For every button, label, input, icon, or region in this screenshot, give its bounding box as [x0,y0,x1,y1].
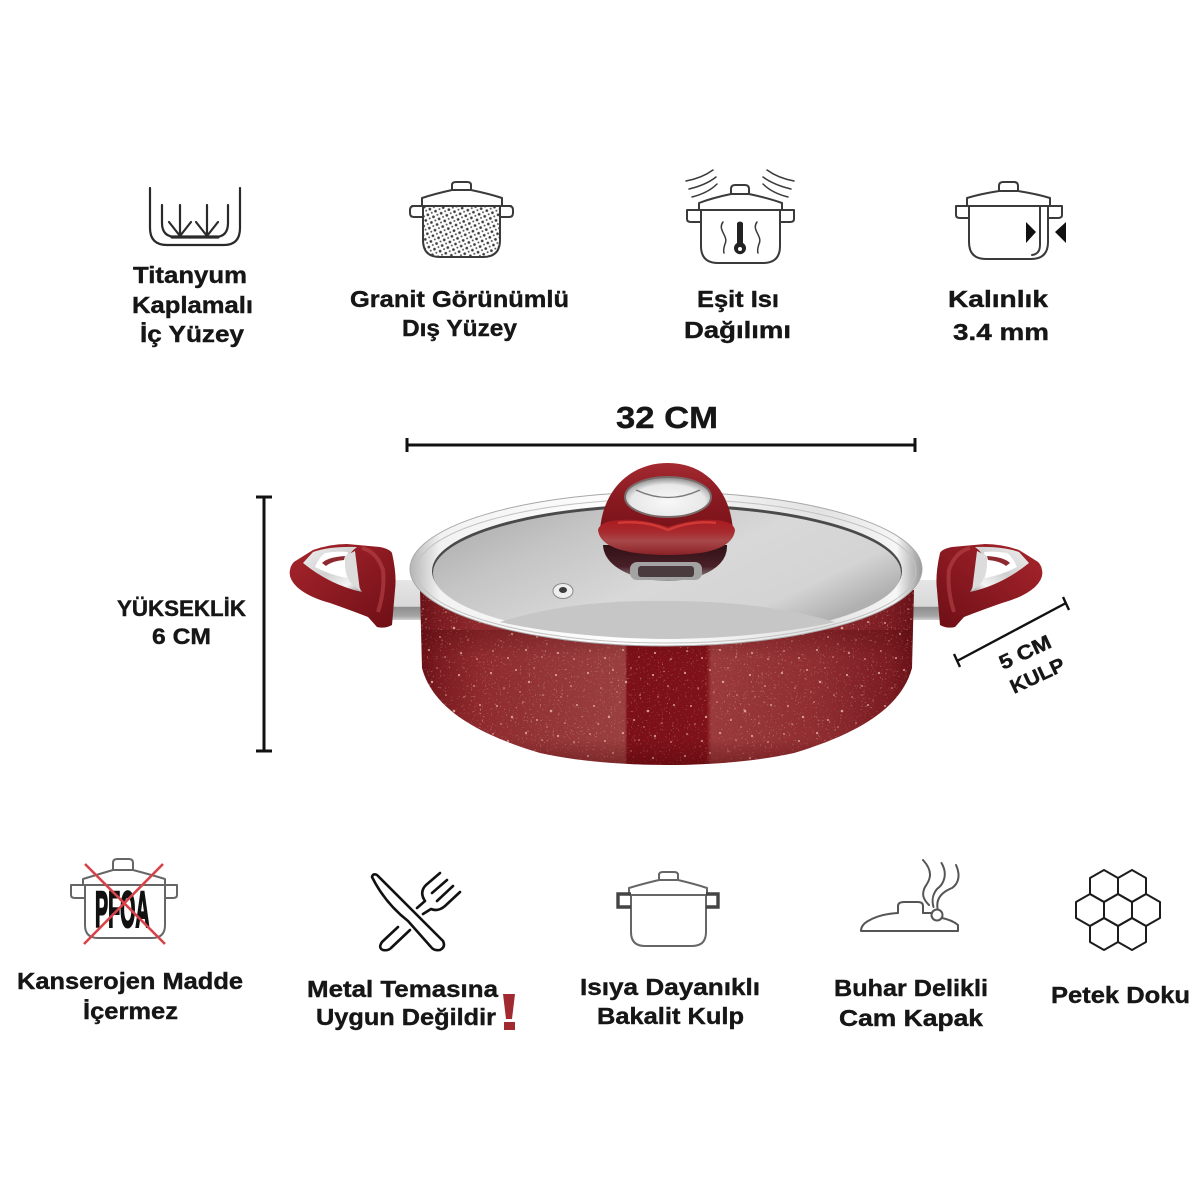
icon: crossed out PFOA pot [71,859,177,944]
label: Metal Temasına Uygun Değildir: Uygun Değildir [316,1004,496,1030]
label: Kanserojen Madde İçermez: Kanserojen Madde [17,968,243,994]
label: Eşit Isı Dağılımı [684,286,791,343]
icon: pot with bold handles [618,872,718,946]
right handle [910,544,1042,628]
label: Titanyum Kaplamalı İç Yüzey: Kaplamalı [132,292,253,318]
label: Buhar Delikli Cam Kapak: Cam Kapak [839,1005,983,1031]
feature: granite exterior [350,182,569,341]
dimension: height 6 CM: YÜKSEKLİK [117,596,246,621]
icon: pot with wall thickness arrows [956,182,1066,259]
label: Buhar Delikli Cam Kapak [834,975,988,1031]
pot body [415,585,919,770]
dimension: width 32 CM [407,400,915,452]
icon: red exclamation mark [503,994,515,1030]
dimension: height 6 CM: 6 CM [152,624,211,649]
label: Isıya Dayanıklı Bakalit Kulp: Bakalit Kulp [597,1003,744,1029]
knob reflection [603,545,727,581]
icon: crossed out PFOA pot: PFOA [95,882,150,939]
product photo: red granite pot with glass lid [290,463,1042,770]
dimension: height 6 CM [117,497,272,751]
dimension: width 32 CM: 32 CM [616,400,718,435]
rim [410,492,922,646]
left handle [290,544,422,628]
label: Titanyum Kaplamalı İç Yüzey: Titanyum [133,262,247,288]
label: Kanserojen Madde İçermez: İçermez [83,998,178,1024]
label: Buhar Delikli Cam Kapak: Buhar Delikli [834,975,988,1001]
feature: PFOA free [17,859,243,1024]
label: Kalınlık 3.4 mm [948,286,1049,345]
label: Isıya Dayanıklı Bakalit Kulp [580,974,760,1029]
label: Granit Görünümlü Dış Yüzey: Dış Yüzey [402,315,517,341]
label: Eşit Isı Dağılımı: Eşit Isı [697,286,779,312]
dimension: handle 5 CM: 5 CM [996,631,1055,675]
glass lid [432,504,902,638]
label: Titanyum Kaplamalı İç Yüzey: İç Yüzey [140,321,244,347]
icon: pot with granite speckle [410,182,513,257]
icon: lid with steam [861,860,959,931]
icon: pot with thermometer and heat waves [686,170,794,263]
icon: crossed knife and fork [372,873,460,950]
feature: steam vent glass lid [834,860,988,1031]
label: Granit Görünümlü Dış Yüzey: Granit Görünümlü [350,286,569,312]
label: Petek Doku: Petek Doku [1051,982,1190,1008]
feature: even heat [684,170,794,343]
feature: not metal safe [307,873,515,1030]
feature: honeycomb texture [1051,870,1190,1008]
label: Titanyum Kaplamalı İç Yüzey [132,262,253,347]
label: Granit Görünümlü Dış Yüzey [350,286,569,341]
lid knob [598,463,735,555]
dimension: handle 5 CM: KULP [1007,654,1069,699]
label: Kalınlık 3.4 mm: 3.4 mm [953,319,1049,345]
label: Kanserojen Madde İçermez [17,968,243,1024]
label: Metal Temasına Uygun Değildir: Metal Temasına [307,976,498,1002]
pan floor [500,601,835,639]
label: Metal Temasına Uygun Değildir [307,976,498,1030]
label: Kalınlık 3.4 mm: Kalınlık [948,286,1048,312]
label: Eşit Isı Dağılımı: Dağılımı [684,317,791,343]
feature: thickness [948,182,1066,345]
feature: heat resistant handle [580,872,760,1029]
steam vent [553,584,573,598]
label: Isıya Dayanıklı Bakalit Kulp: Isıya Dayanıklı [580,974,760,1000]
icon: coated bowl with arrows [150,188,240,245]
icon: honeycomb hexagons [1076,870,1160,950]
dimension: handle 5 CM [954,597,1069,699]
feature: titanium interior [132,188,253,347]
